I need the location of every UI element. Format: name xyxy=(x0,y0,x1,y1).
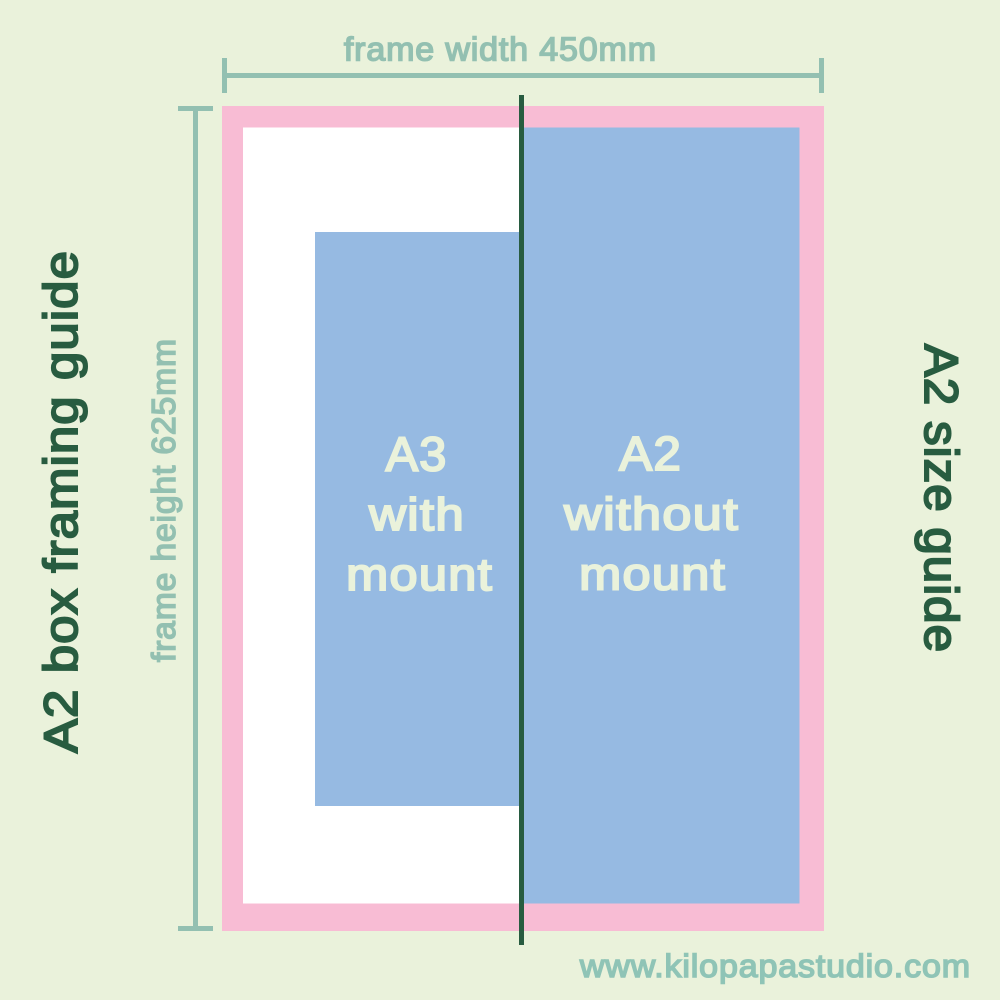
A2 print panel xyxy=(521,128,800,904)
right heading: A2 size guide xyxy=(915,344,968,653)
A3 label: A3 xyxy=(386,428,448,482)
frame outer pink xyxy=(222,106,824,931)
centre divider line xyxy=(519,95,524,945)
A3 label xyxy=(346,428,493,600)
mount white area xyxy=(243,128,521,904)
frame width dimension: frame width 450mm xyxy=(344,30,657,67)
A2 label: A2 xyxy=(619,428,682,481)
A3 print panel xyxy=(315,232,521,806)
website url: www.kilopapastudio.com xyxy=(579,948,971,984)
A3 label: mount xyxy=(346,549,493,600)
frame height dimension: frame height 625mm xyxy=(145,338,182,662)
frame width dimension xyxy=(222,30,824,93)
A2 label xyxy=(563,428,739,599)
left heading: A2 box framing guide xyxy=(34,250,87,753)
A2 label: without xyxy=(563,488,739,539)
A3 label: with xyxy=(368,489,465,540)
frame height dimension xyxy=(145,106,213,931)
A2 label: mount xyxy=(579,548,726,599)
